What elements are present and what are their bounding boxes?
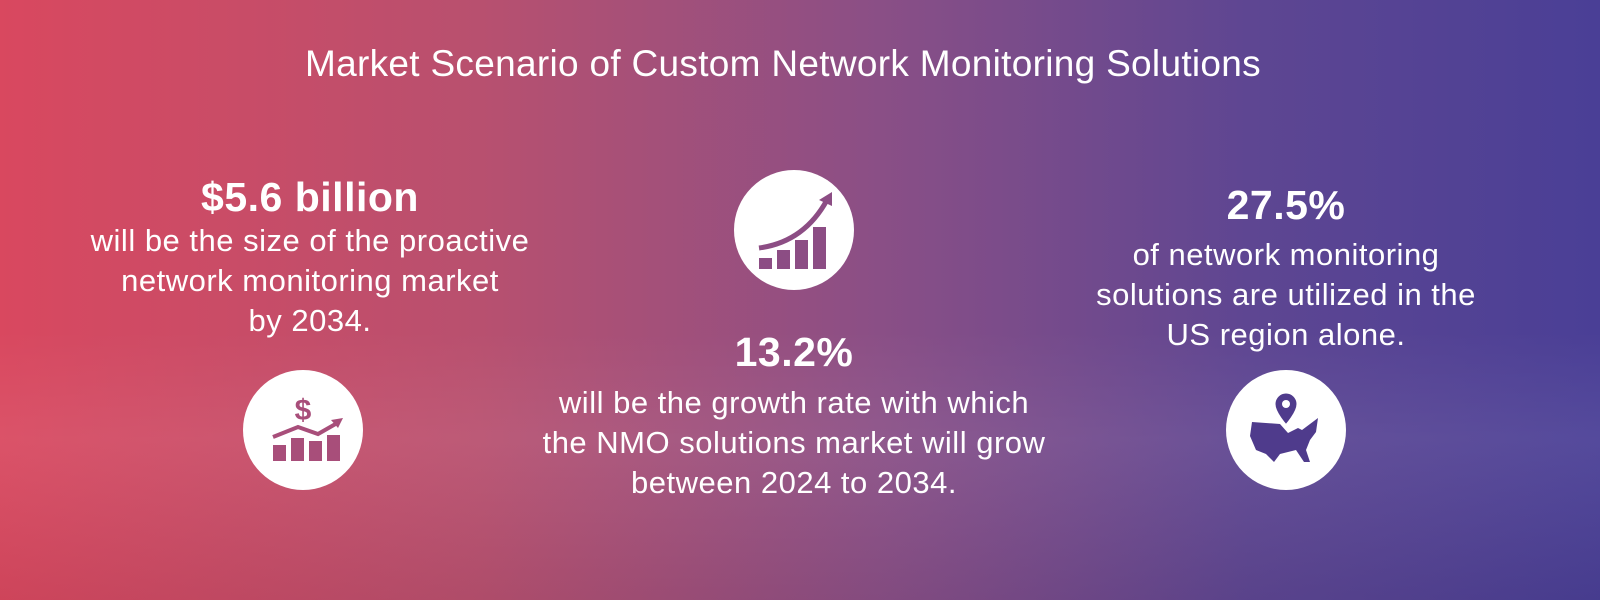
stat: 27.5%: of network monitoring	[1133, 237, 1439, 272]
stat: 5.6 billion	[90, 174, 529, 338]
background city texture	[0, 330, 1600, 600]
stat: 13.2%: the NMO solutions market will grow	[543, 425, 1045, 460]
stat: 13.2%: will be the growth rate with which	[559, 385, 1029, 420]
stat: 5.6 billion: by 2034.	[249, 303, 371, 338]
stat: 27.5%: solutions are utilized in the	[1096, 277, 1476, 312]
stat: 13.2%: 13.2%	[735, 329, 853, 375]
title: Market Scenario of Custom Network Monitoring Solutions	[305, 43, 1261, 84]
stat: 5.6 billion: will be the size of the proactive	[91, 223, 529, 258]
icon: dollar growth	[243, 370, 363, 490]
stat: 27.5%	[1096, 182, 1476, 352]
icon: growth chart	[734, 170, 854, 290]
stat: 5.6 billion: network monitoring market	[121, 263, 499, 298]
stat: 27.5%: 27.5%	[1227, 182, 1345, 228]
stat: 13.2%: between 2024 to 2034.	[631, 465, 957, 500]
stat: 27.5%: US region alone.	[1167, 317, 1405, 352]
icon: US map pin	[1226, 370, 1346, 490]
stat: 13.2%	[543, 329, 1045, 500]
stat: 5.6 billion: $5.6 billion	[201, 174, 419, 220]
icon: dollar growth: $	[295, 394, 312, 427]
